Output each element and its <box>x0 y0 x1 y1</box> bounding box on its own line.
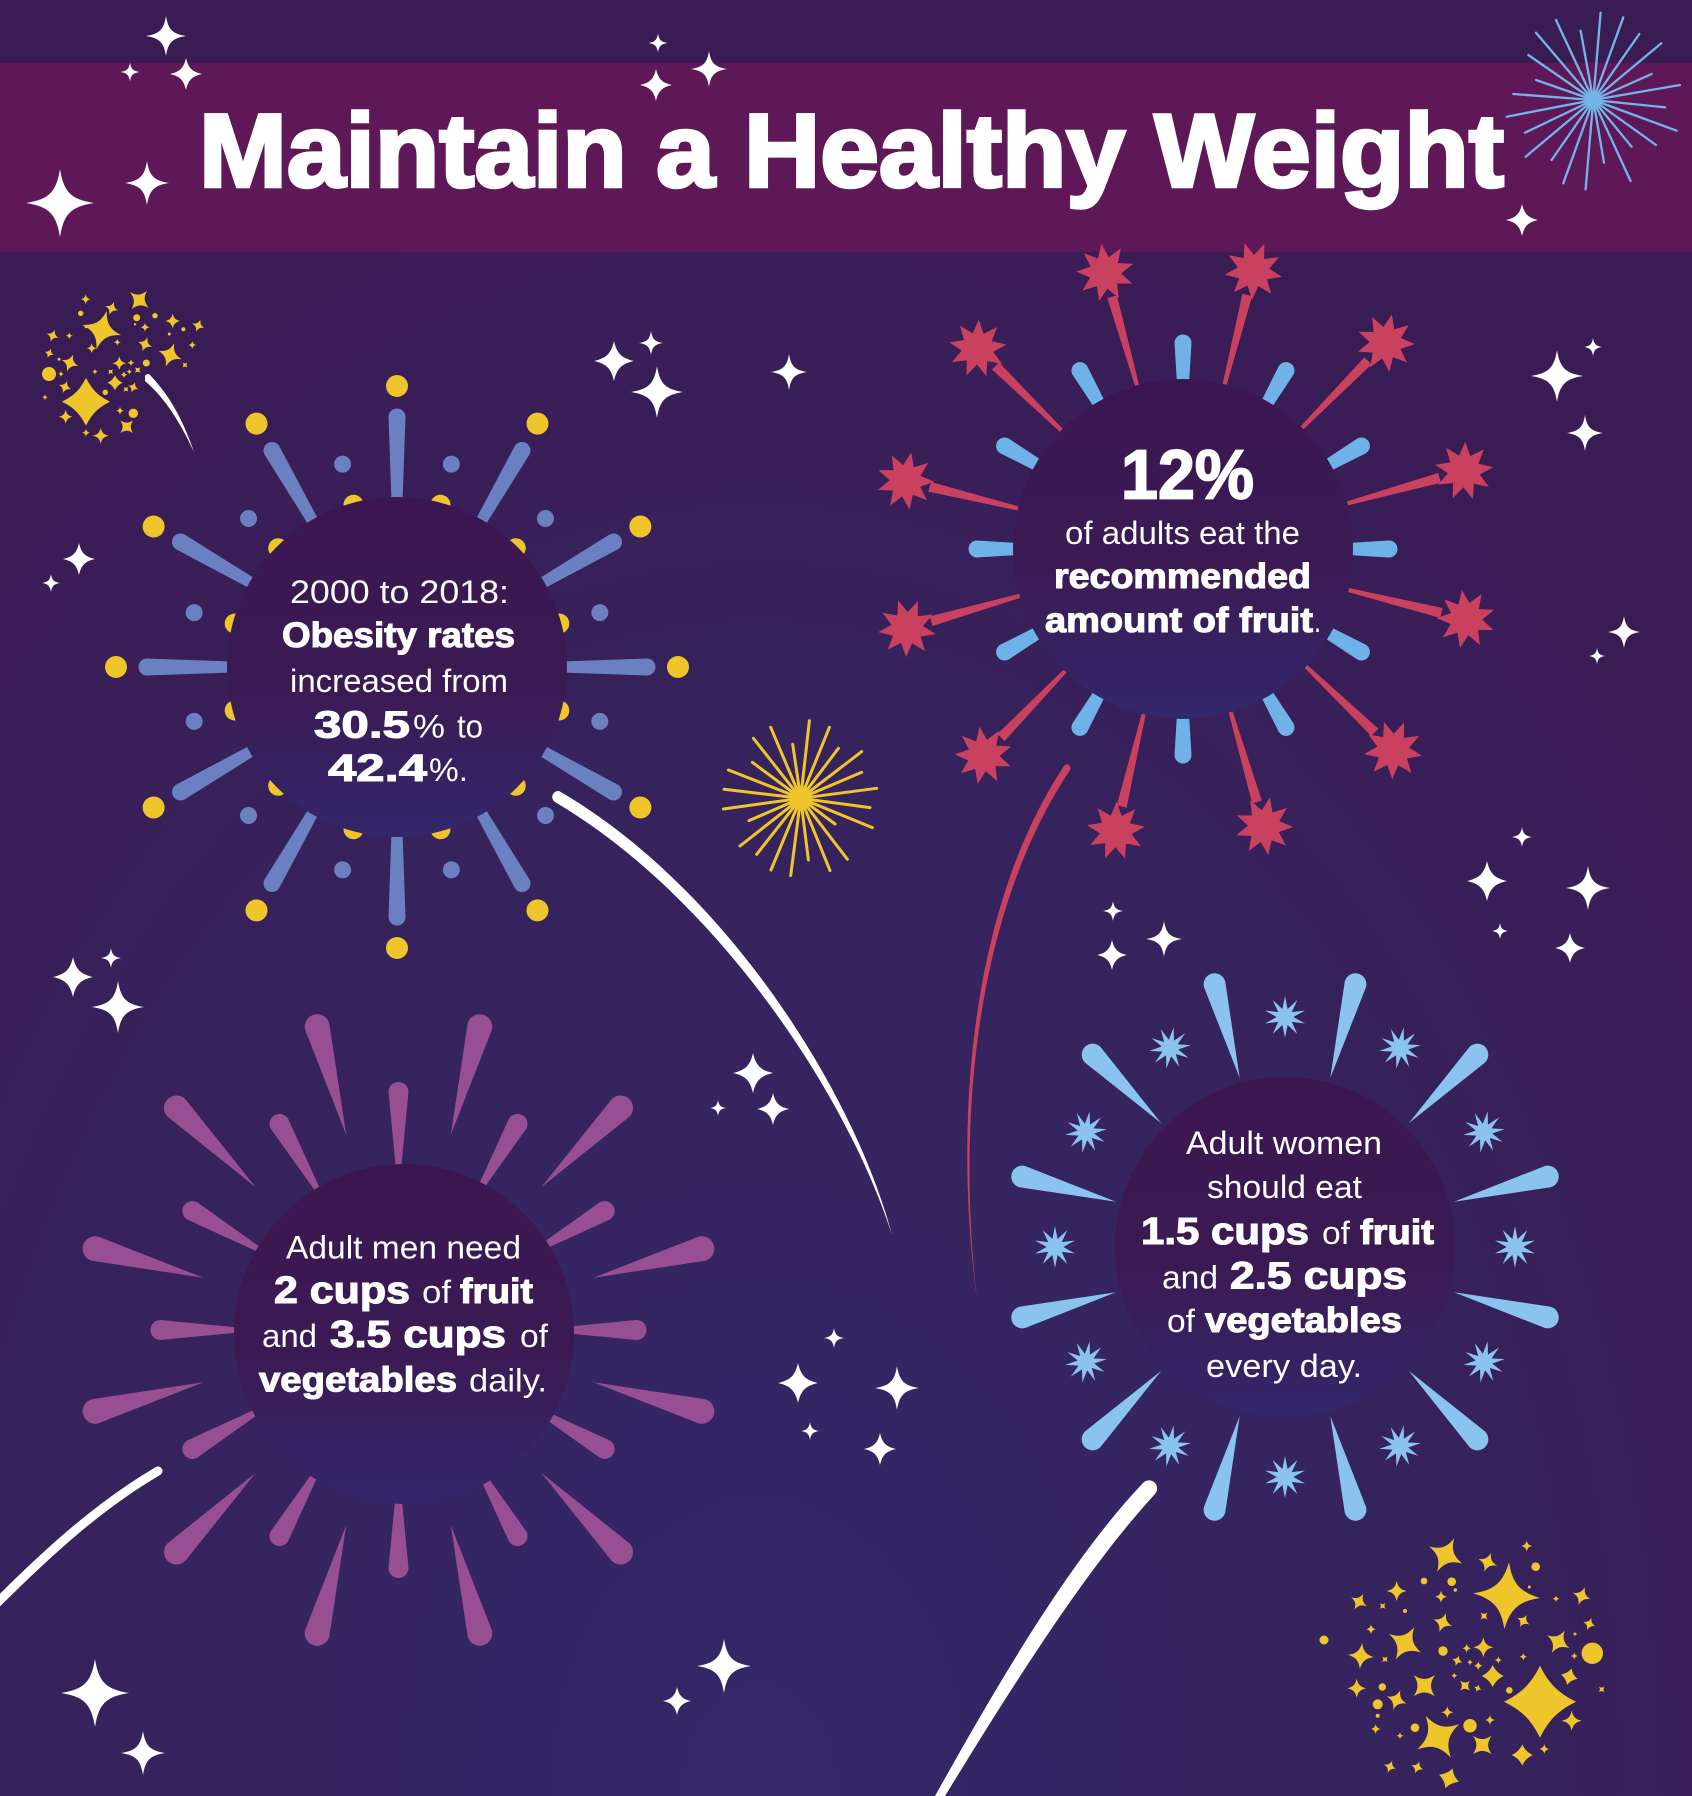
adult women text: of <box>1167 1303 1195 1339</box>
adult women text: 1.5 cups <box>1141 1211 1309 1253</box>
adult men text: and <box>262 1318 317 1354</box>
obesity text: Obesity rates <box>282 616 515 655</box>
adult women text: every day. <box>1206 1348 1362 1384</box>
adult men text: of <box>422 1274 451 1310</box>
center disc <box>227 497 567 837</box>
fruit text: amount of fruit <box>1045 601 1313 640</box>
purple burst <box>80 1011 717 1649</box>
adult women text: 2.5 cups <box>1230 1256 1407 1298</box>
center disc <box>234 1164 574 1504</box>
adult women text: Adult women <box>1186 1125 1382 1161</box>
title: Maintain a Healthy Weight <box>199 94 1504 210</box>
adult women text: vegetables <box>1205 1301 1402 1340</box>
light blue burst <box>1009 971 1561 1523</box>
obesity text: increased from <box>290 663 508 699</box>
adult women text <box>1141 1125 1434 1384</box>
center disc <box>1013 379 1353 719</box>
firework panel: fruit 12 percent <box>866 231 1506 871</box>
obesity text: 42.4 <box>328 748 427 790</box>
yellow and blue burst <box>105 375 689 959</box>
adult women text: of <box>1322 1215 1350 1251</box>
adult men text: of <box>520 1318 548 1354</box>
gold sparkler bottom right <box>1320 1530 1607 1792</box>
obesity text: to <box>457 708 483 744</box>
adult men text <box>259 1230 548 1400</box>
firework: blue thin burst <box>1507 13 1680 189</box>
obesity text: 30.5 <box>314 704 410 746</box>
rocket trail: white long <box>552 791 892 1235</box>
fruit text: of adults eat the <box>1065 515 1300 551</box>
obesity text <box>282 574 515 790</box>
adult men text: Adult men need <box>286 1230 521 1266</box>
fruit text: recommended <box>1054 557 1311 596</box>
adult women text: fruit <box>1360 1213 1434 1252</box>
adult men text: fruit <box>460 1272 533 1311</box>
obesity text: 2000 to 2018: <box>290 574 509 610</box>
fruit text: . <box>1314 603 1321 639</box>
firework: yellow thin burst <box>723 721 877 876</box>
sparkler trail top left <box>145 374 194 452</box>
firework panel: adult women <box>1009 971 1561 1523</box>
fruit text: 12% <box>1121 436 1254 514</box>
adult women text: and <box>1162 1260 1218 1296</box>
firework panel: obesity rates <box>105 375 689 959</box>
adult women text: should eat <box>1207 1169 1362 1205</box>
firework panel: adult men <box>80 1011 717 1649</box>
center disc <box>1115 1077 1455 1417</box>
adult men text: 2 cups <box>274 1270 410 1312</box>
adult men text: daily. <box>469 1362 547 1398</box>
adult men text: vegetables <box>259 1360 457 1400</box>
red and blue burst <box>866 231 1506 871</box>
adult men text: 3.5 cups <box>330 1314 506 1356</box>
gold sparkler top left <box>42 283 207 444</box>
fruit text <box>1045 436 1321 640</box>
obesity text: %. <box>429 752 468 788</box>
rocket trail: white bottom left <box>0 1471 158 1606</box>
obesity text: % <box>413 708 445 744</box>
rocket trail: white bottom right <box>935 1480 1157 1796</box>
rocket trail: red <box>967 764 1071 1300</box>
title banner <box>0 63 1692 252</box>
